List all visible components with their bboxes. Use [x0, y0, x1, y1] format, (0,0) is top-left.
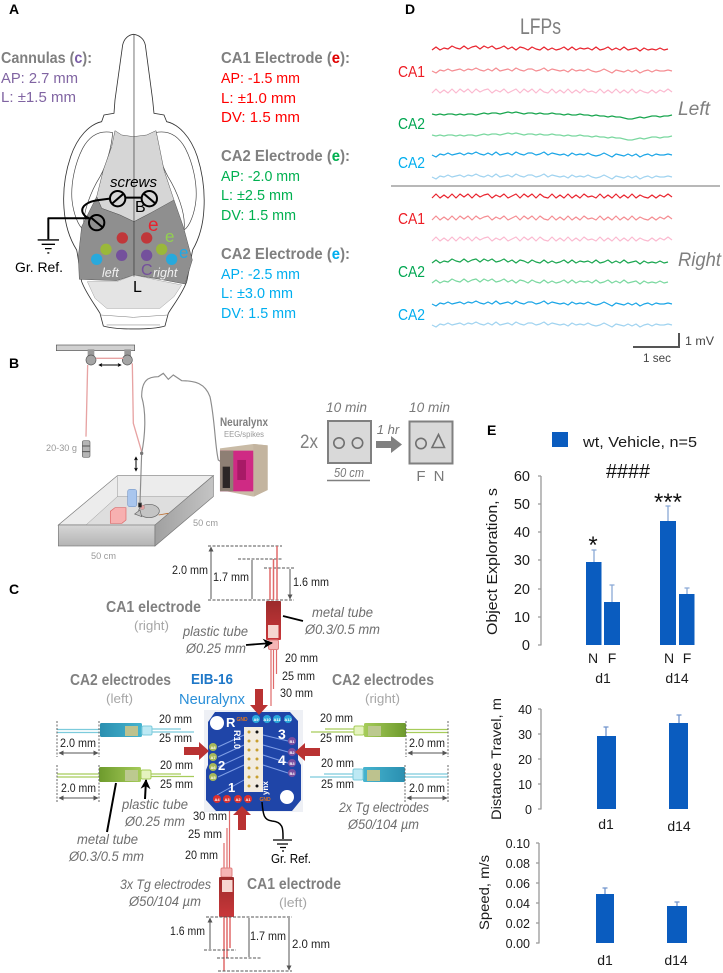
tick labels: 20	[518, 753, 532, 767]
metal tube	[266, 601, 281, 640]
delay arrow	[376, 422, 402, 453]
silkscreen: 3	[278, 726, 286, 742]
CA2 left heading: CA2 electrodes	[70, 672, 171, 689]
tick labels: 40	[518, 703, 532, 717]
CA2 right lower electrode (blue)	[310, 758, 448, 832]
hemisphere labels: Right	[678, 250, 722, 271]
repetition label: 2x	[300, 432, 318, 453]
blue object	[128, 489, 137, 507]
category labels	[588, 650, 691, 686]
dimensions text: 1.7 mm	[250, 931, 286, 943]
pad labels: GND	[236, 717, 248, 723]
title CA1 left: CA1 electrode	[247, 876, 341, 893]
significance markers: ####	[606, 461, 651, 483]
skull labels: screws	[110, 174, 158, 191]
pad labels: A11	[273, 717, 281, 722]
text: CA2 blue electrode coordinates: DV: 1.5 mm	[221, 306, 296, 322]
tube captions: metal tube	[312, 604, 373, 620]
text: CA2 blue electrode coordinates: CA2 Electrode (e):	[221, 246, 350, 263]
black pointers	[246, 616, 303, 645]
electrode and cannula sites	[91, 232, 177, 265]
tick labels: 10	[514, 610, 530, 626]
significance markers	[588, 461, 682, 559]
title CA1 right: (right)	[134, 618, 169, 633]
category labels: d14	[667, 818, 691, 834]
panel: D LFP traces	[391, 1, 722, 365]
scale bar: 1 mV	[685, 336, 714, 348]
protocol captions: 10 min	[409, 399, 450, 415]
pad labels: A4	[214, 797, 220, 802]
Tg electrode caption	[338, 799, 429, 832]
screws and ground wire	[48, 191, 157, 239]
bars	[597, 723, 688, 809]
skull labels: Gr. Ref.	[15, 259, 63, 275]
significance markers: ***	[654, 489, 682, 516]
skull diagram	[38, 34, 204, 329]
channel labels: CA2	[398, 116, 425, 133]
frontal bone	[97, 131, 174, 222]
tick labels: 50	[514, 497, 530, 513]
title CA1 right: CA1 electrode	[106, 599, 201, 616]
ground reference: Gr. Ref.	[271, 851, 311, 866]
ground reference	[262, 802, 311, 866]
tube captions: plastic tube	[182, 623, 248, 639]
text: CA2 blue electrode coordinates: L: ±3.0 mm	[221, 286, 293, 302]
tip wires	[224, 917, 230, 971]
error bars	[604, 715, 682, 736]
dimensions text: 25 mm	[188, 829, 222, 841]
arena box	[58, 476, 213, 546]
pad labels: B1	[289, 739, 295, 744]
channel labels: CA2	[398, 264, 425, 281]
CA2 right lower electrode (blue): 25 mm	[321, 779, 354, 791]
text: CA1 electrode coordinates	[221, 50, 350, 126]
category labels: d14	[664, 952, 688, 968]
category labels: F	[683, 650, 691, 666]
tick labels: 0.08	[506, 857, 530, 871]
circuit traces	[217, 735, 288, 795]
pad labels: GND	[259, 797, 271, 803]
dimensions text: 2.0 mm	[292, 939, 330, 951]
panel letter B: B	[9, 355, 19, 371]
silkscreen: 2	[218, 758, 225, 773]
chart: speed	[476, 837, 688, 968]
text: CA2 blue electrode coordinates: AP: -2.5 mm	[221, 267, 300, 283]
plastic tube	[221, 868, 232, 877]
category labels	[598, 816, 691, 834]
legend: wt, Vehicle, n=5	[582, 434, 697, 451]
y axis title: Speed, m/s	[476, 855, 492, 930]
tick labels: 0.04	[506, 897, 530, 911]
setup labels: 50 cm	[91, 551, 116, 562]
traces: left hemisphere	[432, 46, 672, 179]
panel letter E: E	[487, 422, 496, 438]
protocol captions: 10 min	[326, 399, 367, 415]
CA2 left upper electrode (blue): 20 mm	[159, 714, 192, 726]
title CA1 right	[106, 599, 201, 633]
skull outline	[64, 34, 204, 329]
lead wires	[271, 650, 276, 706]
black pointers	[107, 780, 146, 832]
dimension lines	[204, 917, 292, 971]
CA2 left lower electrode (green): 2.0 mm	[61, 783, 96, 795]
setup labels: 20-30 g	[46, 443, 77, 454]
tick labels: 0	[525, 803, 532, 817]
text: CA1 electrode coordinates: CA1 Electrode (e):	[221, 50, 350, 67]
lead wires	[224, 811, 230, 868]
skull labels: L	[133, 279, 142, 296]
dimensions text: 2.0 mm	[172, 565, 208, 577]
protocol captions: N	[434, 468, 444, 485]
CA2 left lower electrode (green): 20 mm	[160, 760, 193, 772]
y axis title: Object Exploration, s	[484, 488, 501, 635]
metal tube	[219, 877, 234, 917]
tether and arena drawing	[56, 345, 268, 546]
tick labels: 0	[522, 638, 530, 654]
dimensions text	[170, 811, 330, 951]
skull labels: left	[102, 266, 119, 280]
tip wires	[270, 546, 277, 600]
CA2 left lower electrode (green)	[57, 760, 194, 864]
pad labels: A8	[210, 745, 216, 750]
central connector	[244, 727, 263, 792]
text: cannulas: AP: 2.7 mm	[1, 71, 78, 87]
LFP title: LFPs	[520, 14, 561, 39]
Tg electrode caption: 2x Tg electrodes	[338, 799, 429, 815]
EIB-16 board	[204, 710, 303, 812]
panel: B behavioural setup	[9, 345, 452, 562]
dimensions text: 1.7 mm	[213, 572, 249, 584]
CA1 left electrode	[120, 811, 341, 971]
EIB-16 board heading	[179, 671, 245, 708]
scale bar	[633, 333, 714, 365]
CA2 left heading	[70, 672, 171, 706]
category labels: N	[664, 650, 674, 666]
dimension lines	[208, 546, 295, 600]
category labels: d14	[665, 670, 689, 686]
tick labels: 0.00	[506, 937, 530, 951]
pad labels: A1	[245, 797, 251, 802]
CA2 left lower electrode (green): 25 mm	[160, 779, 193, 791]
bars	[586, 521, 694, 645]
text: CA2 green electrode coordinates: DV: 1.5 mm	[221, 208, 296, 224]
tube captions: Ø0.25 mm	[124, 813, 185, 829]
text: CA1 electrode coordinates: DV: 1.5 mm	[221, 110, 300, 126]
dimensions text: 30 mm	[193, 811, 227, 823]
tick labels: 30	[514, 553, 530, 569]
pad labels: A2	[235, 797, 241, 802]
pad labels: A7	[210, 755, 216, 760]
dimensions text: 1.6 mm	[170, 926, 205, 938]
tube captions: plastic tube	[121, 796, 188, 812]
channel labels: CA2	[398, 155, 425, 172]
legend	[552, 432, 697, 451]
silkscreen: 1	[228, 780, 235, 795]
channel labels: CA1	[398, 64, 425, 81]
y axis title: Distance Travel, m	[488, 698, 504, 820]
mouse and cable	[135, 373, 223, 518]
traces: right hemisphere	[432, 194, 672, 327]
text: cannulas: Cannulas (c):	[1, 50, 92, 67]
CA2 right lower electrode (blue): 20 mm	[321, 758, 354, 770]
panel letter C: C	[9, 581, 19, 597]
tick labels: 10	[518, 778, 532, 792]
category labels: d1	[598, 816, 614, 832]
pad labels: A12	[284, 717, 292, 722]
EIB-16 board heading: Neuralynx	[179, 691, 245, 708]
red object	[110, 508, 126, 523]
panel: A skull and coordinates	[1, 1, 350, 329]
text: CA1 electrode coordinates: L: ±1.0 mm	[221, 91, 296, 107]
CA2 right lower electrode (blue): 2.0 mm	[409, 783, 445, 795]
hemisphere labels: Left	[678, 99, 711, 120]
significance markers: *	[588, 532, 598, 559]
pad labels: A3	[224, 797, 230, 802]
tube captions: Ø0.3/0.5 mm	[304, 621, 380, 637]
setup labels: Neuralynx	[220, 417, 269, 429]
tube captions	[68, 796, 188, 864]
Tg electrode caption: Ø50/104 µm	[347, 816, 419, 832]
CA2 left upper electrode (blue)	[57, 714, 194, 757]
pad labels: A9	[253, 717, 259, 722]
channel labels	[398, 64, 425, 324]
protocol: novel object task	[300, 399, 452, 485]
Neuralynx acquisition rack	[220, 444, 268, 497]
tick labels: 40	[514, 525, 530, 541]
axis	[538, 476, 541, 646]
text: cannulas: L: ±1.5 mm	[1, 90, 76, 106]
tube captions: metal tube	[77, 831, 138, 847]
CA2 right heading	[332, 672, 434, 706]
divider between left and right	[391, 185, 720, 187]
ground symbol	[38, 240, 59, 253]
dimensions text	[172, 565, 329, 700]
parietal bone	[78, 197, 192, 284]
pad labels: A6	[210, 765, 216, 770]
plastic tube	[268, 640, 278, 650]
pad labels: A10	[263, 717, 271, 722]
skull labels: B	[135, 199, 146, 216]
category labels	[597, 952, 688, 968]
error bars	[592, 506, 690, 602]
channel labels: CA2	[398, 307, 425, 324]
tick labels	[514, 469, 530, 654]
text: CA1 electrode coordinates: AP: -1.5 mm	[221, 71, 300, 87]
title CA1 left: (left)	[279, 895, 307, 910]
silkscreen: R1.0	[232, 730, 242, 749]
CA2 left upper electrode (blue): 2.0 mm	[60, 738, 96, 750]
pad labels: B3	[289, 761, 295, 766]
silkscreen: ynx	[261, 781, 270, 795]
mounting holes	[210, 716, 224, 730]
tube captions	[182, 604, 380, 656]
tick labels: 20	[514, 582, 530, 598]
tick labels: 30	[518, 728, 532, 742]
dimensions text: 1.6 mm	[293, 577, 329, 589]
hemisphere labels	[678, 99, 722, 271]
title CA1 left	[247, 876, 341, 910]
delay arrow: 1 hr	[377, 422, 400, 437]
axis	[538, 709, 541, 810]
protocol captions	[326, 399, 450, 485]
counterweight	[82, 441, 90, 457]
setup labels: 50 cm	[193, 518, 218, 529]
CA2 right upper electrode (green): 25 mm	[320, 733, 353, 745]
tick labels	[518, 703, 532, 817]
setup labels	[46, 417, 269, 562]
tube captions: Ø0.3/0.5 mm	[68, 848, 144, 864]
test arena	[410, 422, 452, 464]
Tg electrode caption	[120, 876, 211, 909]
CA2 left heading: (left)	[106, 691, 133, 706]
tick labels: 0.06	[506, 877, 530, 891]
protocol captions: F	[416, 468, 426, 485]
dimensions text: 30 mm	[280, 688, 313, 700]
silkscreen: 4	[278, 752, 286, 768]
CA2 right upper electrode (green): 2.0 mm	[409, 738, 445, 750]
skull labels: C	[141, 262, 153, 279]
dimensions text: 25 mm	[282, 671, 315, 683]
sample arena	[328, 421, 371, 463]
tick labels: 0.10	[506, 837, 530, 851]
CA2 left upper electrode (blue): 25 mm	[159, 733, 192, 745]
tube captions: Ø0.25 mm	[185, 640, 246, 656]
channel labels: CA1	[398, 211, 425, 228]
panel: C electrode assembly	[9, 546, 448, 971]
tick labels: 60	[514, 469, 530, 485]
chart: distance travelled	[488, 698, 691, 834]
panel letter A: A	[9, 1, 19, 17]
pulley rail	[56, 345, 142, 471]
category labels: d1	[597, 952, 613, 968]
text: CA2 green electrode coordinates: CA2 Electrode (e):	[221, 148, 350, 165]
pad labels: B2	[289, 750, 295, 755]
pad labels	[209, 715, 296, 803]
dimensions text: 20 mm	[185, 850, 218, 862]
text: CA2 green electrode coordinates	[221, 148, 350, 224]
category labels: d1	[595, 670, 611, 686]
CA2 right upper electrode (green)	[311, 713, 448, 757]
bars	[596, 894, 687, 943]
Tg electrode caption: 3x Tg electrodes	[120, 876, 211, 892]
CA1 right electrode	[106, 546, 380, 706]
pad labels: A5	[210, 775, 216, 780]
text: CA2 blue electrode coordinates	[221, 246, 350, 322]
skull labels	[15, 174, 188, 296]
skull labels: e	[165, 227, 174, 246]
protocol captions: 50 cm	[334, 466, 364, 480]
text: CA2 green electrode coordinates: L: ±2.5 mm	[221, 188, 293, 204]
EIB-16 board heading: EIB-16	[191, 671, 233, 688]
CA2 right upper electrode (green): 20 mm	[320, 713, 353, 725]
text: cannulas	[1, 50, 92, 106]
CA2 right heading: CA2 electrodes	[332, 672, 434, 689]
axis	[536, 843, 539, 944]
panel letter D: D	[405, 1, 415, 17]
pad labels: B4	[289, 771, 295, 776]
chart: object exploration	[484, 461, 694, 686]
panel: E behaviour charts	[476, 422, 697, 968]
category labels: N	[588, 650, 598, 666]
skull labels: e	[148, 215, 159, 236]
Tg electrode caption: Ø50/104 µm	[128, 893, 201, 909]
CA2 right heading: (right)	[365, 691, 400, 706]
tick labels: 0.02	[506, 917, 530, 931]
silkscreen	[218, 715, 286, 795]
red insertion arrows	[184, 689, 320, 830]
dimensions text: 20 mm	[285, 653, 318, 665]
skull labels: right	[153, 266, 178, 280]
error bars	[602, 888, 680, 906]
interparietal bone	[87, 275, 182, 308]
category labels: F	[608, 650, 616, 666]
silkscreen: R	[226, 715, 236, 730]
setup labels: EEG/spikes	[224, 429, 264, 439]
scale bar: 1 sec	[643, 353, 671, 365]
skull labels: e	[179, 243, 188, 262]
tick labels	[506, 837, 530, 951]
eye sockets	[72, 132, 196, 230]
text: CA2 green electrode coordinates: AP: -2.0 mm	[221, 169, 300, 185]
